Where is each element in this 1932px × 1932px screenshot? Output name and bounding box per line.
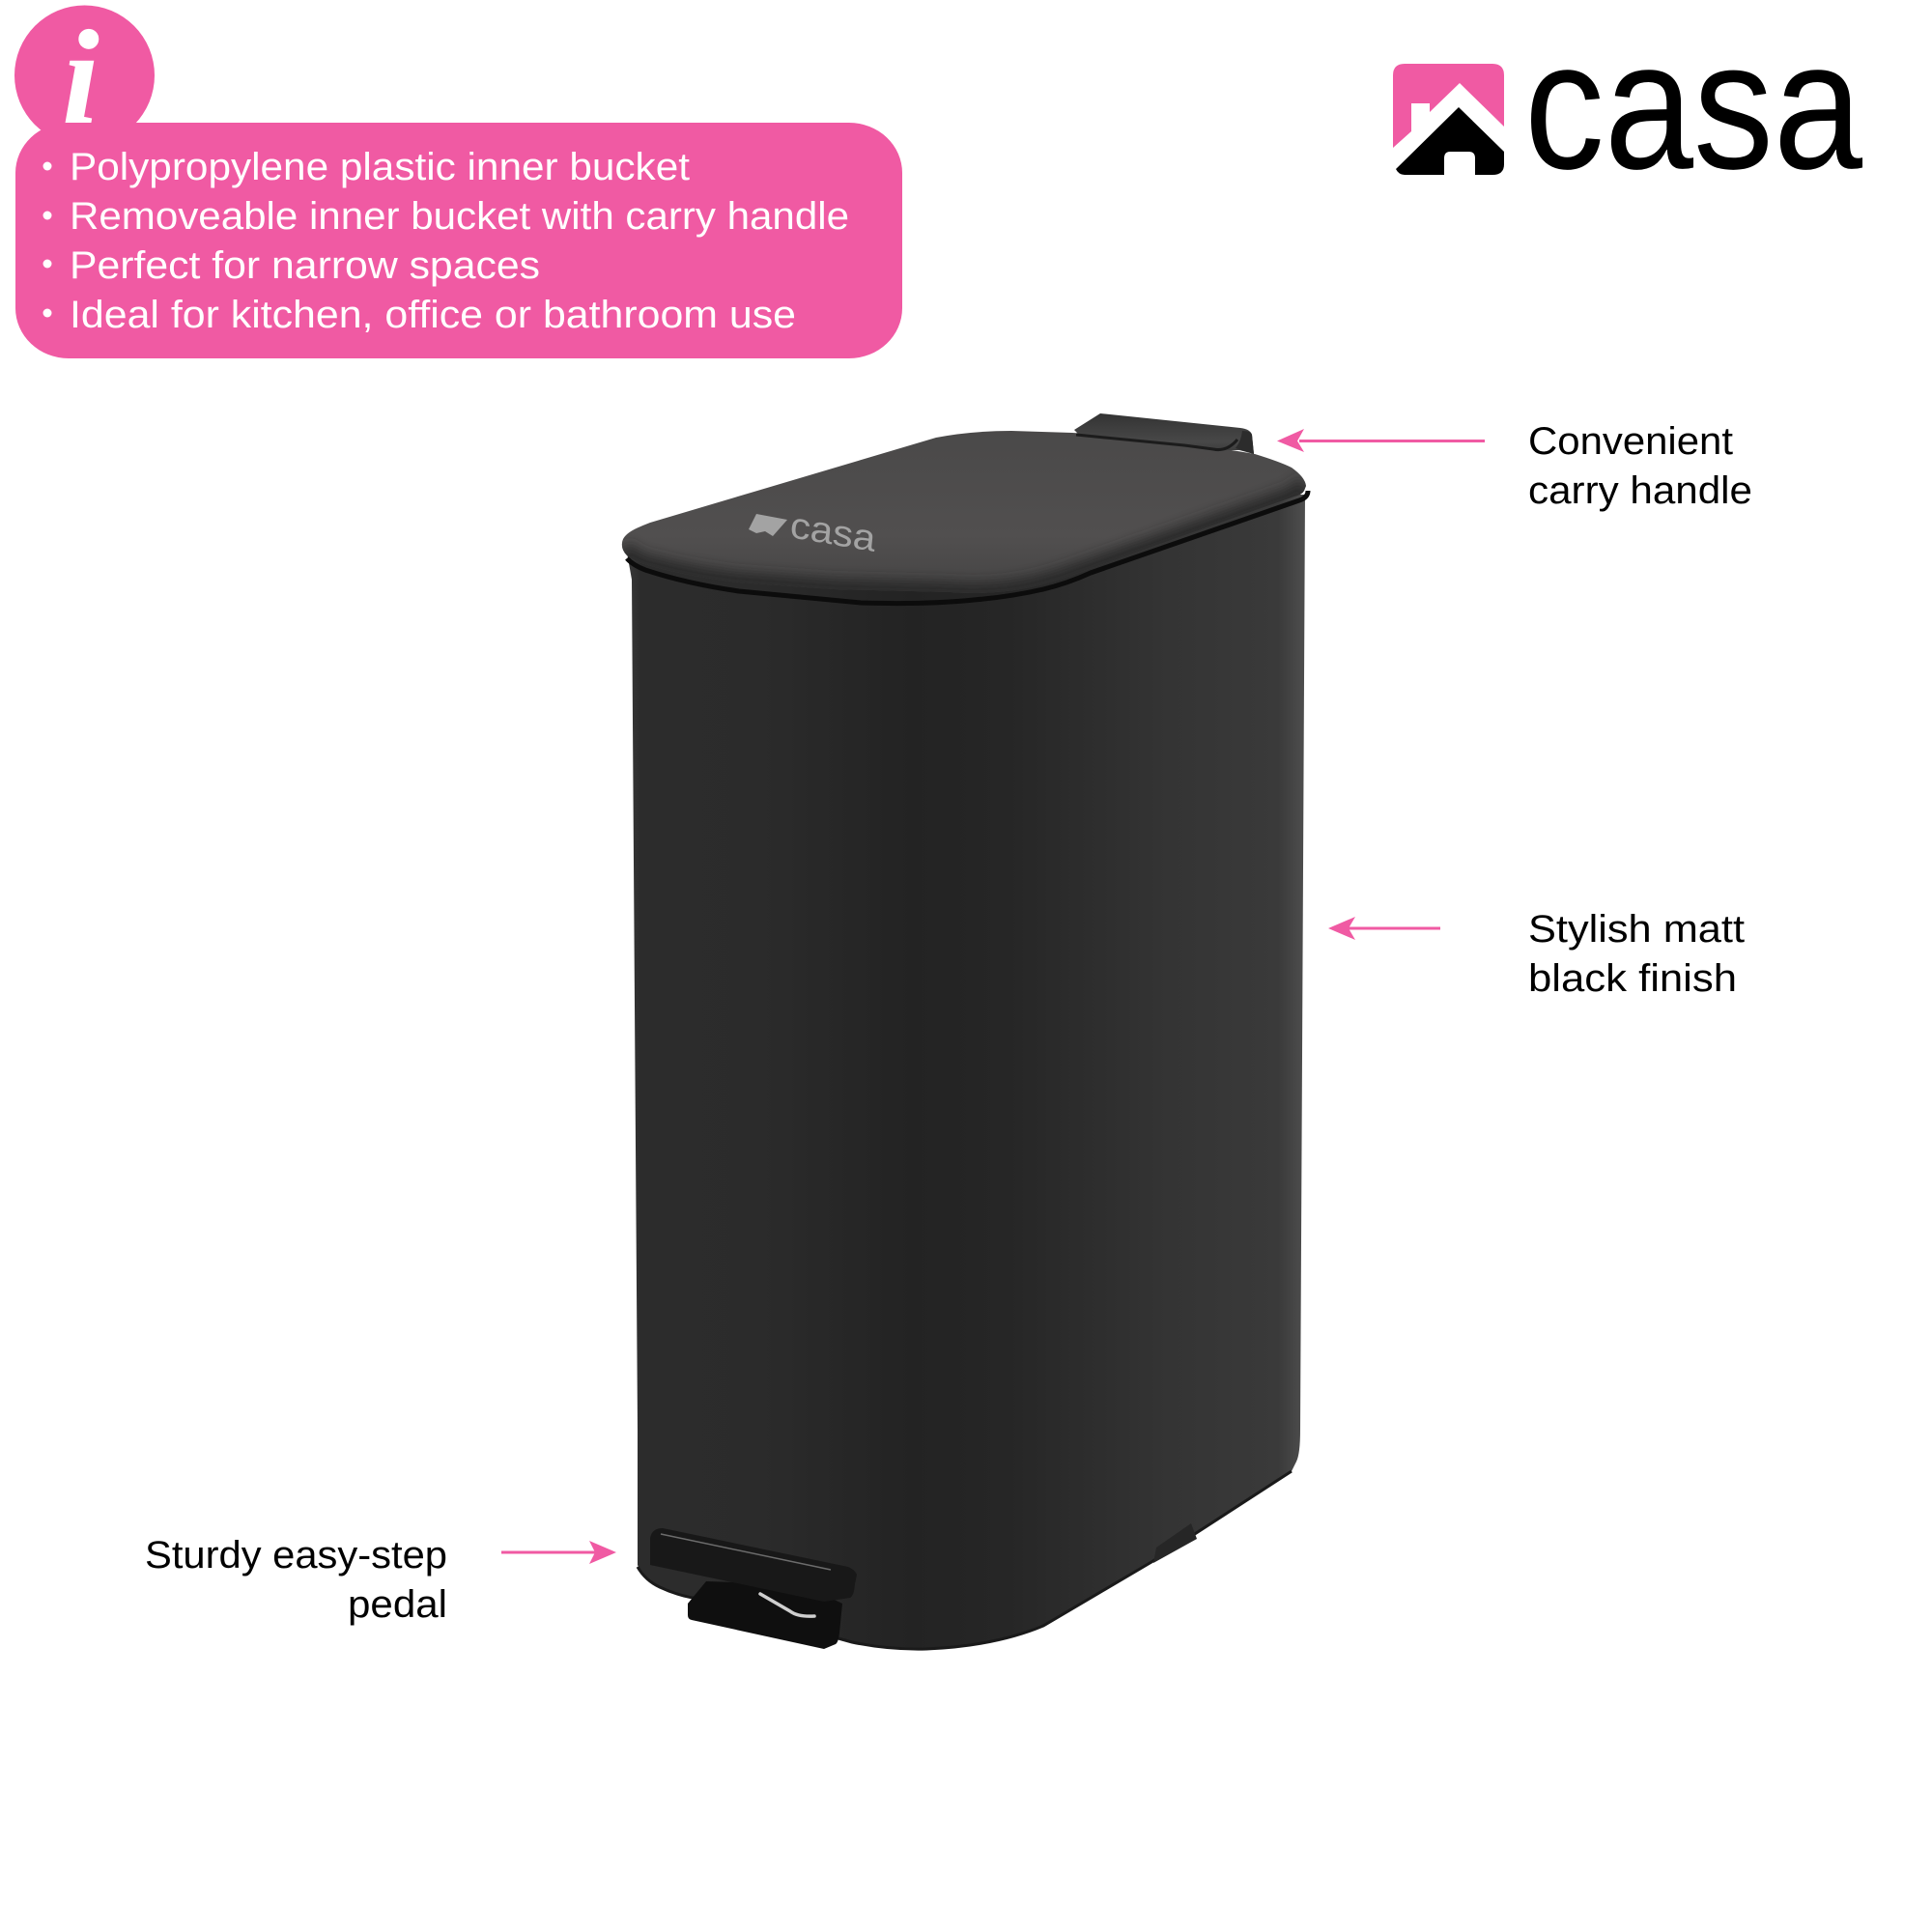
pedal bar bbox=[650, 1528, 857, 1602]
feature list box: Polypropylene plastic inner bucket bbox=[70, 146, 690, 188]
lid logo: casa bbox=[788, 504, 878, 560]
icon: house mark bbox=[1393, 64, 1504, 175]
lid seam bbox=[627, 491, 1308, 604]
bottom rim bbox=[638, 1471, 1292, 1649]
lid logo bbox=[749, 504, 878, 560]
arrow: to handle bbox=[1277, 429, 1485, 452]
arrow: to pedal bbox=[501, 1541, 616, 1564]
feature list box: Removeable inner bucket with carry handle bbox=[70, 195, 849, 238]
feature list box: Ideal for kitchen, office or bathroom use bbox=[70, 294, 796, 336]
label: pedal: pedal bbox=[348, 1583, 447, 1626]
logo wordmark: casa bbox=[1524, 4, 1863, 208]
callout: pedal bbox=[145, 1534, 616, 1626]
casa logo bbox=[1393, 4, 1863, 208]
carry handle bbox=[1074, 413, 1254, 454]
label: carry handle: carry handle bbox=[1528, 469, 1752, 512]
lid top bbox=[622, 431, 1306, 593]
label: pedal: Sturdy easy-step bbox=[145, 1534, 447, 1577]
lower pedal plate and spring bbox=[688, 1581, 842, 1649]
icon: info circle: i bbox=[62, 3, 99, 153]
label: matt finish: Stylish matt bbox=[1528, 908, 1745, 951]
label: carry handle: Convenient bbox=[1528, 420, 1733, 463]
product: pedal bin bbox=[622, 413, 1308, 1649]
callout: carry handle bbox=[1277, 420, 1752, 512]
icon: info circle bbox=[14, 3, 155, 153]
callout: matt finish bbox=[1328, 908, 1745, 1000]
info panel bbox=[14, 3, 902, 358]
arrow: to body bbox=[1328, 917, 1440, 940]
label: matt finish: black finish bbox=[1528, 957, 1737, 1000]
bin body bbox=[627, 495, 1305, 1649]
feature list box: Perfect for narrow spaces bbox=[70, 244, 540, 287]
foot tab bbox=[1153, 1523, 1197, 1563]
feature list box bbox=[15, 123, 902, 358]
